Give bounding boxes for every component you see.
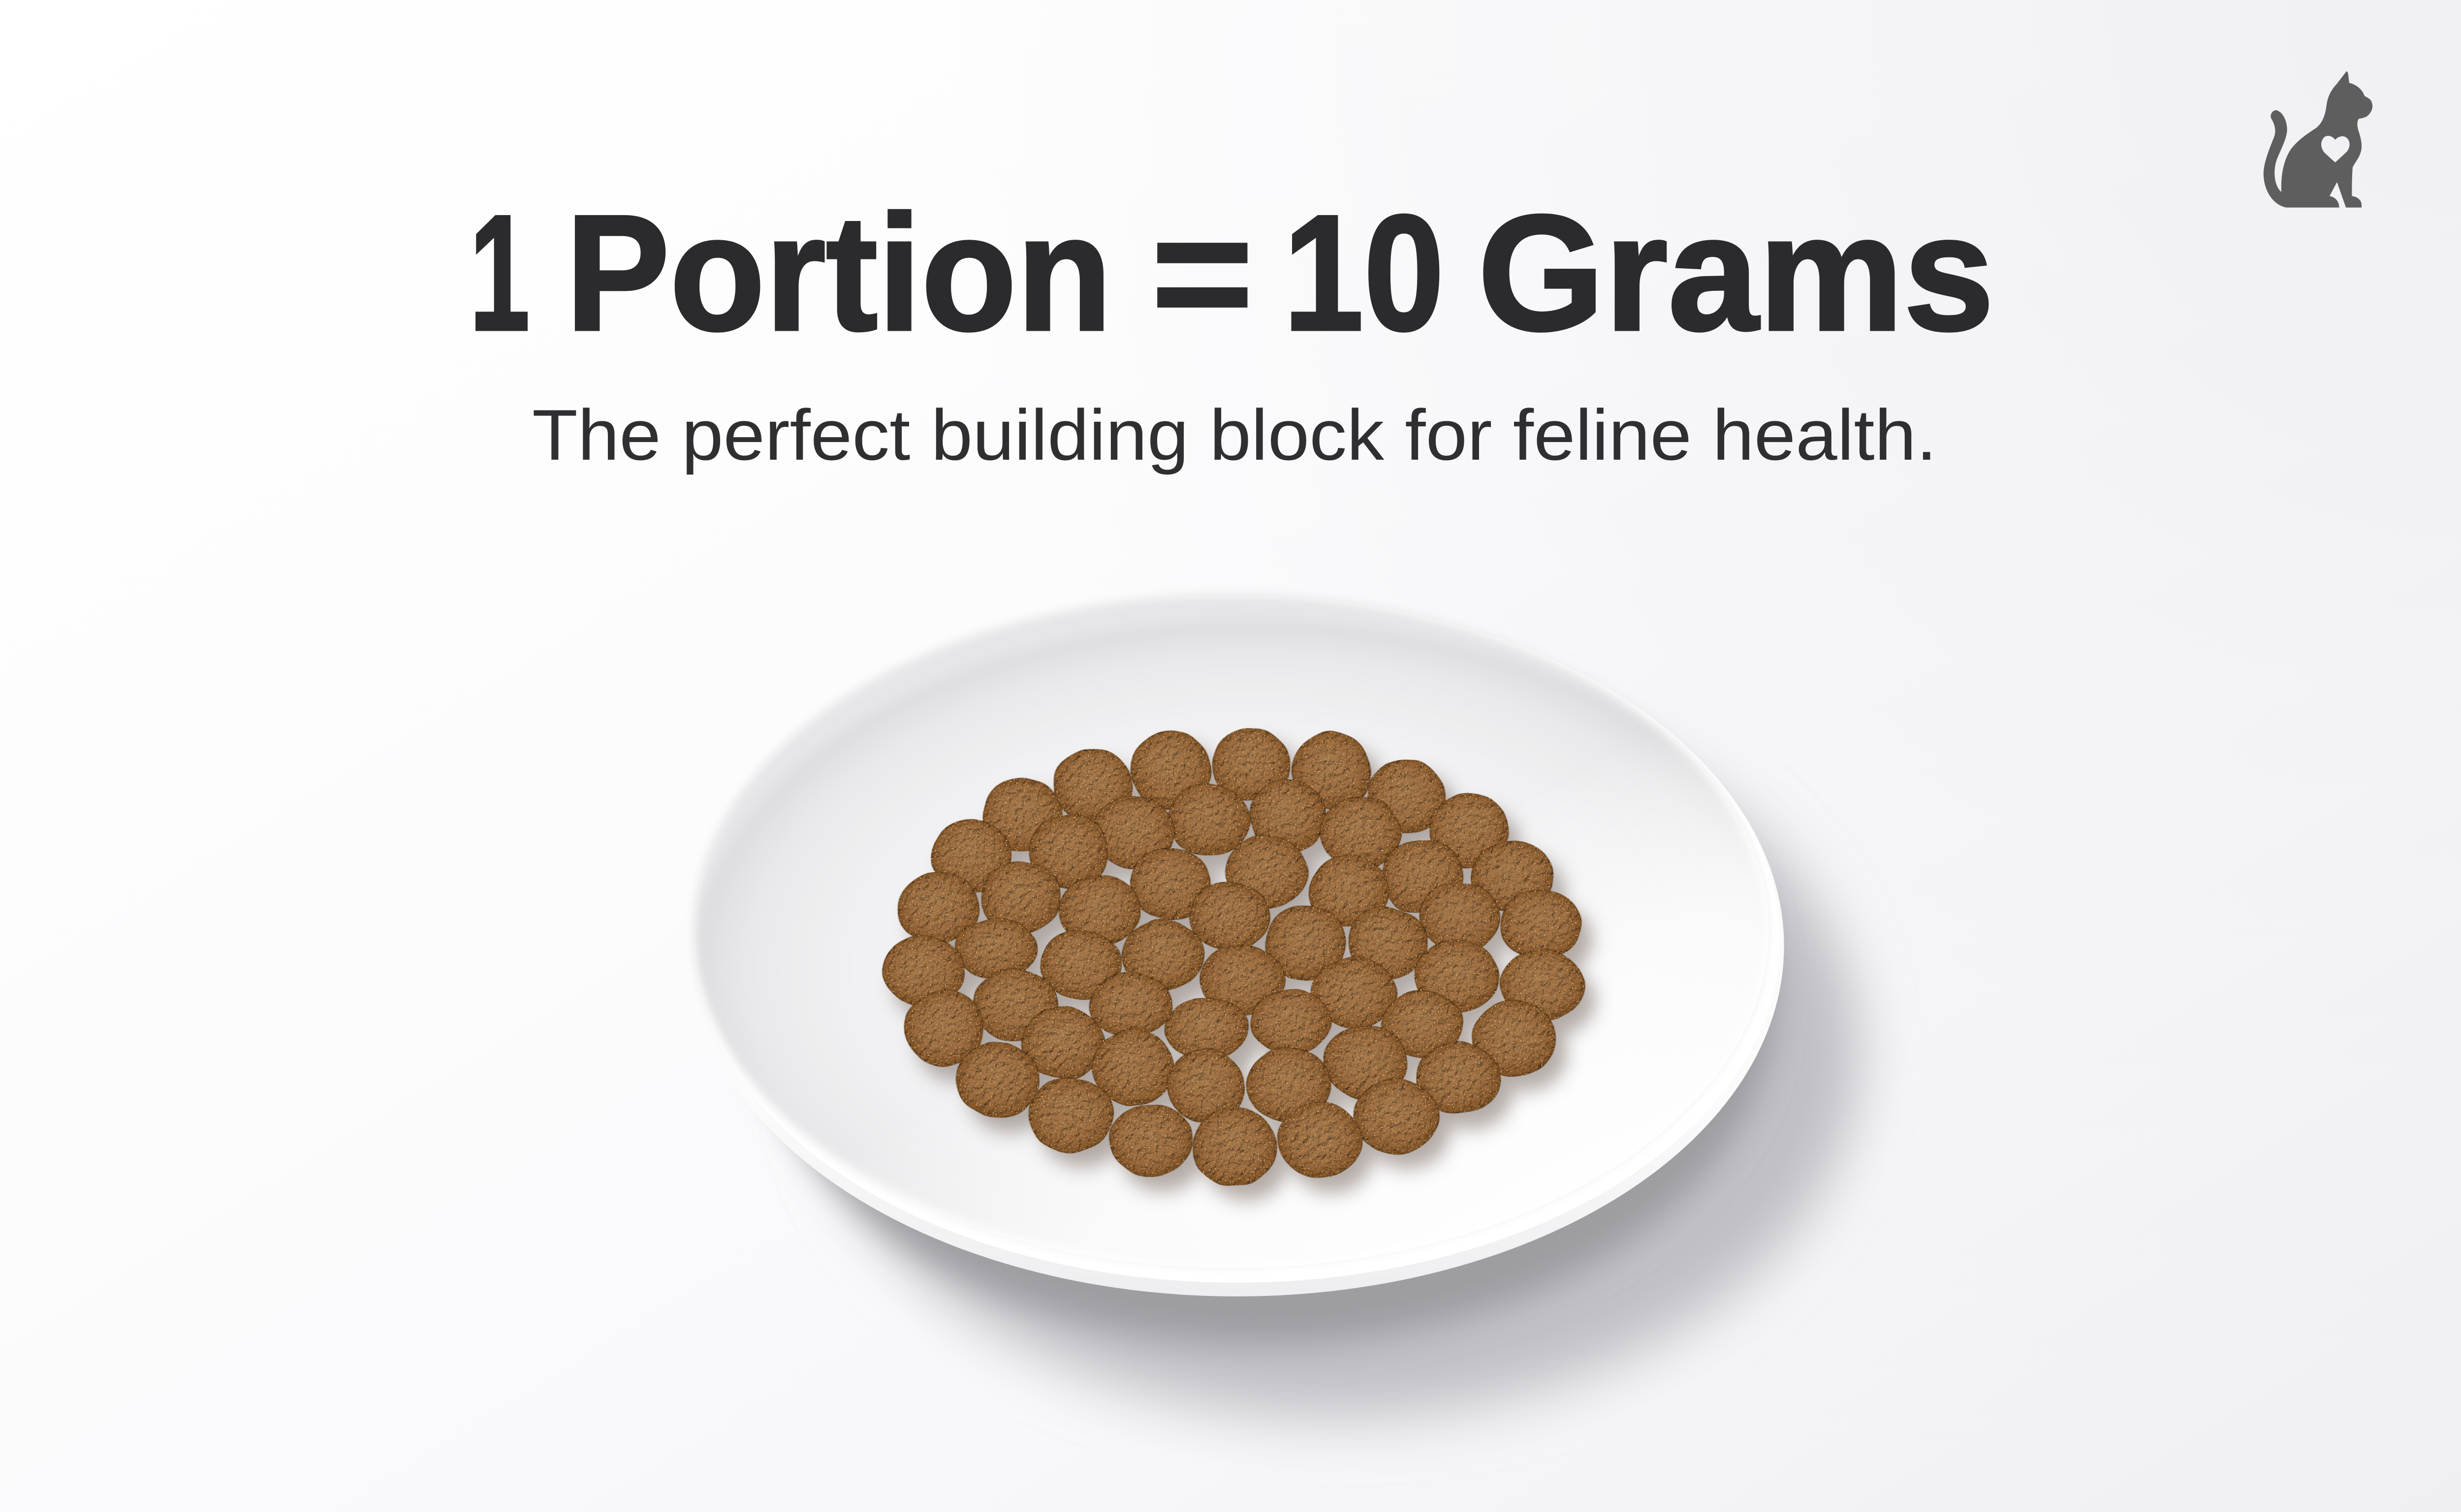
kibble shadows (894, 743, 1596, 1200)
plate shadow (756, 655, 1860, 1418)
subtitle: The perfect building block for feline health. (532, 395, 1937, 475)
title: 10 (1283, 180, 1444, 365)
icon: cat with heart (2264, 71, 2372, 208)
plate (690, 593, 1784, 1296)
title: = (1151, 180, 1253, 365)
title: Grams (1478, 180, 1994, 365)
title: 1 (470, 180, 530, 365)
title: Portion (566, 180, 1112, 365)
kibble pile (883, 728, 1584, 1186)
